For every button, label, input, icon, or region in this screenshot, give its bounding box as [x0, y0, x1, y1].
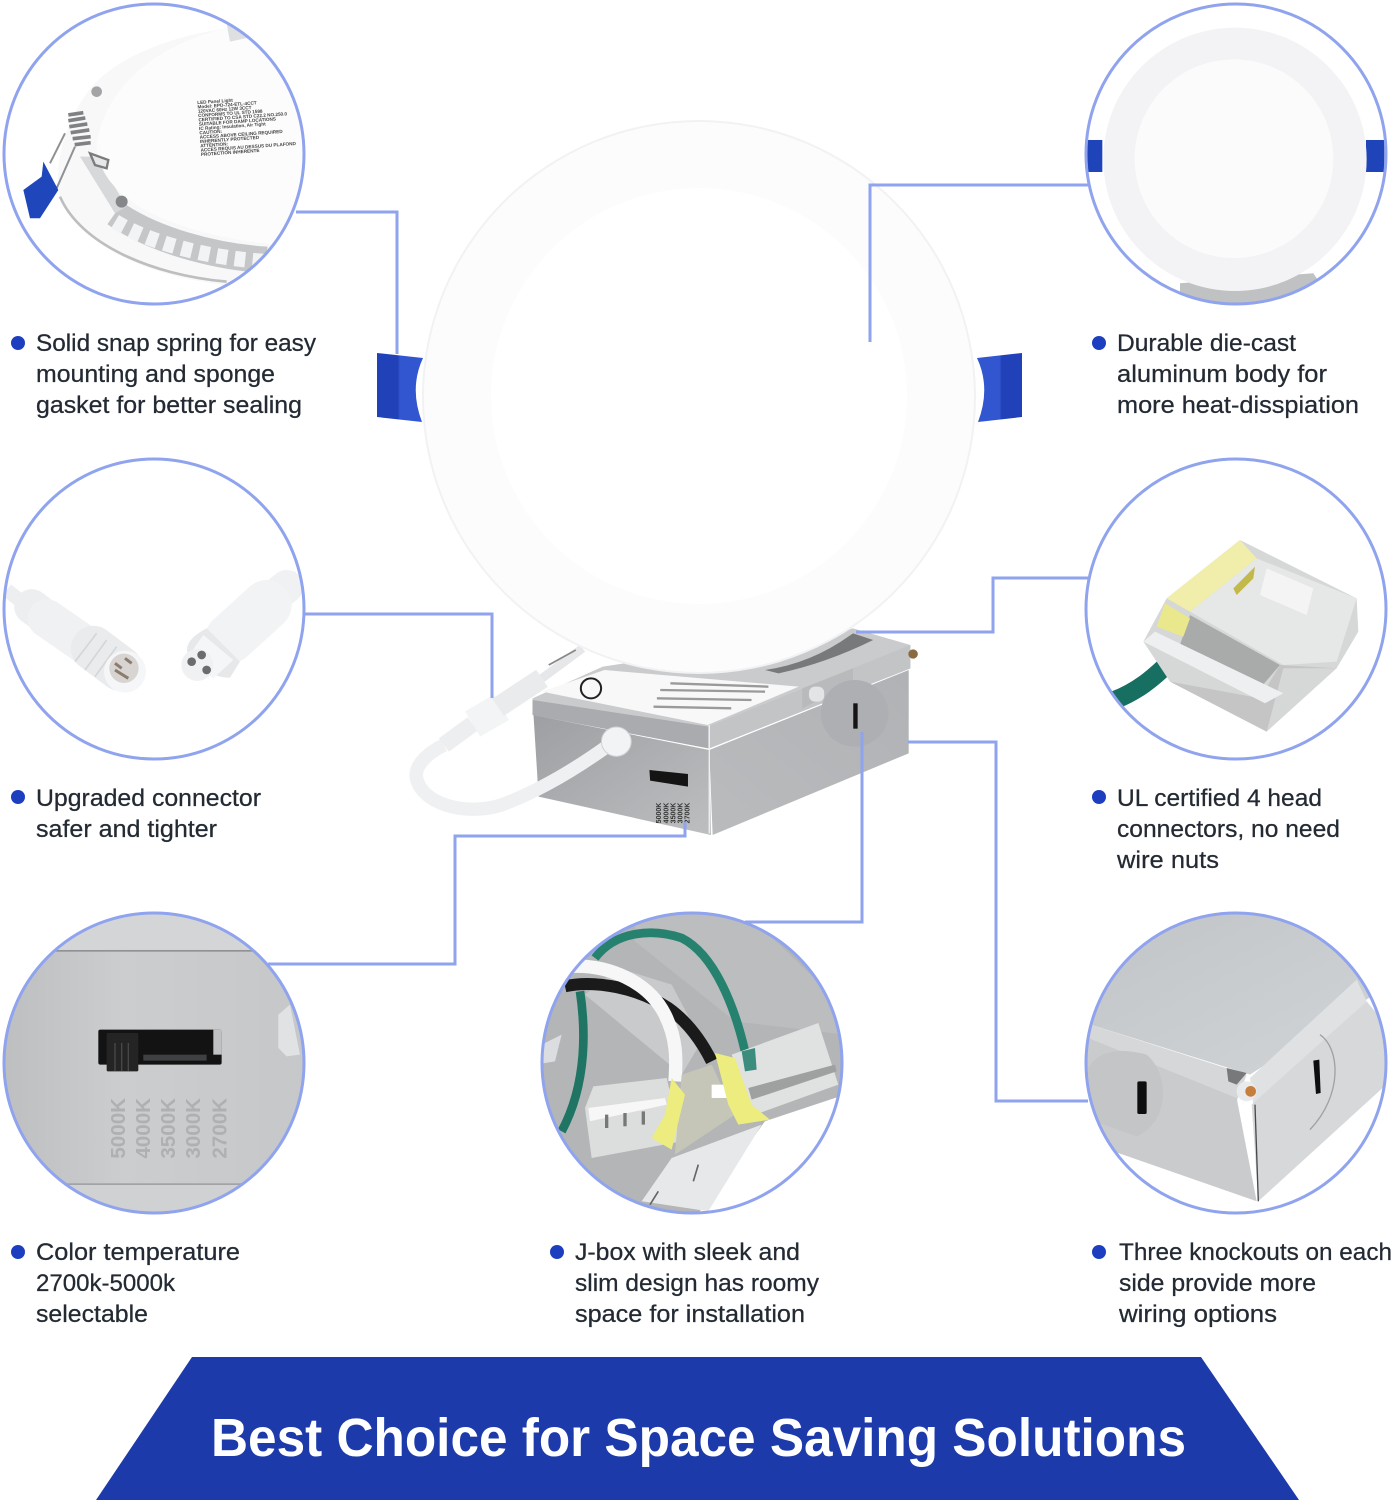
embossed labels: 3000K	[183, 1097, 205, 1159]
white wire	[572, 966, 676, 1081]
circle: spring	[23, 24, 296, 283]
text: knockouts: side provide more	[1119, 1270, 1316, 1297]
text: color temperature: 2700k-5000k	[36, 1270, 176, 1297]
plate	[642, 1125, 762, 1211]
cable	[416, 743, 611, 809]
text: color temperature: Color temperature	[36, 1239, 240, 1266]
white floor	[700, 1098, 836, 1212]
circle: die-cast body	[1088, 28, 1384, 302]
label: CAUTION:	[199, 129, 223, 135]
shadow arc under light	[765, 633, 873, 673]
text: spring	[11, 330, 316, 419]
circle: waterproof connector	[6, 570, 302, 692]
slide switch	[649, 770, 688, 787]
text: 4 head	[1092, 785, 1340, 874]
product: J-box	[416, 628, 918, 835]
female plug	[294, 571, 296, 572]
embossed labels: 4000K	[133, 1097, 155, 1159]
embossed labels: 3500K	[158, 1097, 180, 1159]
label: ACCESS ABOVE CEILING REQUIRED	[200, 129, 283, 140]
label: ACCES REQUIS AU DESSUS DU PLAFOND	[200, 141, 297, 153]
spring	[68, 113, 91, 145]
J-box label	[542, 670, 799, 725]
knockout	[821, 680, 888, 747]
back plate	[102, 168, 115, 187]
label	[198, 98, 296, 156]
blue clip	[23, 162, 58, 218]
label: SUITABLE FOR DAMP LOCATIONS	[199, 116, 276, 127]
J-box top lid	[532, 628, 910, 748]
right knockout	[1310, 1035, 1335, 1130]
side tab	[278, 1005, 300, 1056]
label: ATTENTION:	[200, 141, 229, 148]
switch slot	[98, 1030, 222, 1065]
left knockout	[1120, 1051, 1156, 1065]
text: die-cast	[1092, 330, 1359, 419]
right connector	[732, 1023, 838, 1115]
flange	[58, 28, 310, 285]
product: J-box: 4000K	[663, 802, 670, 823]
text: 4 head: wire nuts	[1116, 847, 1219, 874]
left connector	[585, 1078, 682, 1158]
clip left	[377, 353, 423, 422]
label: 120VAC 60Hz 12W 3CCT	[198, 105, 252, 114]
embossed labels: 2700K	[210, 1097, 232, 1159]
text: 4 head: UL certified 4 head	[1117, 785, 1322, 812]
text: spring: gasket for better sealing	[36, 392, 302, 419]
J-box front face	[534, 715, 711, 835]
green wire	[1115, 662, 1170, 700]
connector lines	[268, 185, 1088, 1101]
waterproof connector	[444, 724, 473, 745]
text: knockouts: Three knockouts on each	[1119, 1239, 1392, 1266]
switch knob	[107, 1033, 138, 1071]
text: 4 head: connectors, no need	[1117, 816, 1340, 843]
text: knockouts	[1092, 1239, 1392, 1328]
yellow clips	[652, 1078, 685, 1150]
label: IC Rating: Insulation, Air Tight	[199, 121, 266, 131]
circle: 4 head connector	[1112, 540, 1358, 732]
banner	[96, 1357, 1299, 1500]
text: color temperature	[11, 1239, 240, 1328]
right face	[1252, 1001, 1396, 1201]
clip right	[977, 353, 1022, 422]
text: connector	[11, 785, 261, 843]
male plug	[6, 584, 21, 604]
text: spring: mounting and sponge	[36, 361, 275, 388]
text: connector: safer and tighter	[36, 816, 217, 843]
text: connector: Upgraded connector	[36, 785, 261, 812]
circle: color temperature switch	[0, 908, 310, 1218]
text: J-box: space for installation	[575, 1301, 805, 1328]
brass screw	[908, 649, 918, 659]
text: die-cast: aluminum body for	[1117, 361, 1327, 388]
clear body	[1143, 540, 1358, 732]
text: J-box: slim design has roomy	[575, 1270, 819, 1297]
label: LED Panel Light	[197, 98, 233, 105]
circle: J-box interior	[544, 914, 840, 1212]
label: INHERENTLY PROTECTED	[200, 135, 260, 144]
embossed labels: 5000K	[108, 1097, 130, 1159]
text: die-cast: Durable die-cast	[1117, 330, 1296, 357]
black wire	[565, 984, 712, 1061]
heat sink	[115, 213, 267, 260]
label: Model: EPD-724-ETL-4CCT	[197, 100, 257, 109]
label: CERTIFIED TO CSA STD C22.2 NO.250.0	[198, 111, 288, 122]
banner: Best Choice for Space Saving Solutions	[211, 1408, 1186, 1468]
circle: knockouts	[1088, 914, 1384, 1202]
text: die-cast: more heat-disspiation	[1117, 392, 1359, 419]
product: J-box: 3500K	[670, 802, 677, 823]
product: J-box: 5000K	[656, 802, 663, 823]
screws	[91, 86, 102, 97]
text: spring: Solid snap spring for easy	[36, 330, 316, 357]
corner notch and screw	[1227, 1068, 1247, 1085]
text: knockouts: wiring options	[1118, 1301, 1277, 1328]
product: J-box: 2700K	[685, 802, 692, 823]
product: round panel light	[377, 120, 1022, 674]
label: PROTECTION INHERENTE	[201, 148, 260, 157]
text: J-box	[550, 1239, 819, 1328]
J-box right face	[709, 670, 909, 835]
embossed labels	[108, 1097, 232, 1159]
text: J-box: J-box with sleek and	[575, 1239, 800, 1266]
yellow top	[1167, 540, 1257, 612]
top face	[1092, 914, 1370, 1074]
label: CONFORMS TO UL STD 1598	[198, 109, 263, 118]
front strip	[1143, 632, 1283, 703]
left face	[1080, 1035, 1257, 1201]
text: color temperature: selectable	[36, 1301, 148, 1328]
circle outlines	[4, 4, 1386, 1213]
green wires	[595, 933, 745, 1051]
middle connector	[675, 1065, 735, 1155]
product: J-box: 3000K	[678, 802, 685, 823]
